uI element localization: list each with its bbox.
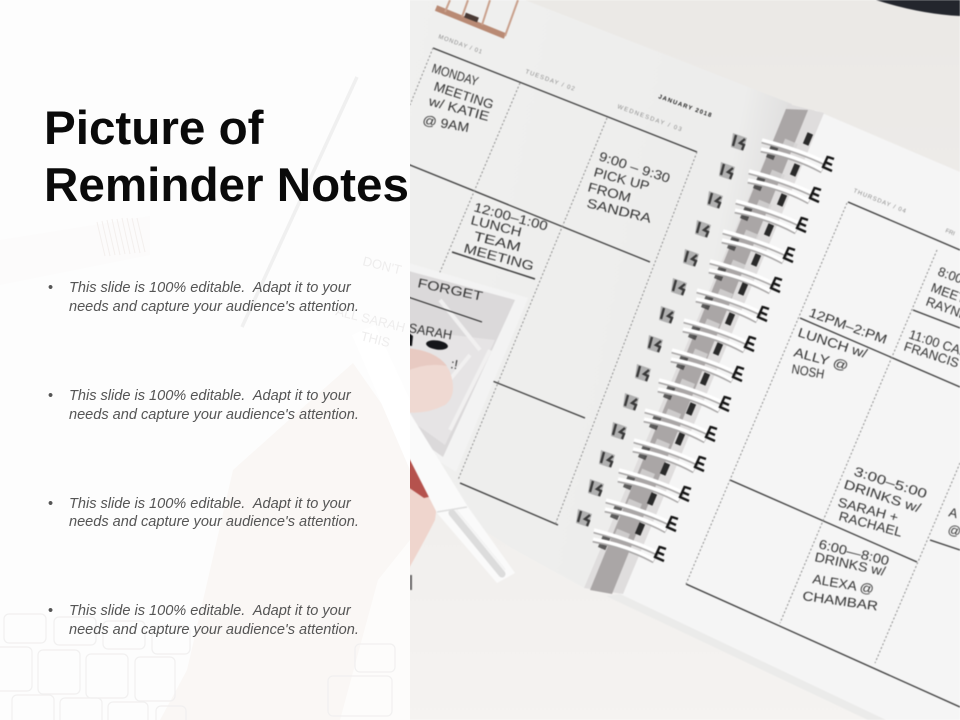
- handwriting left page: PICK UP: [592, 164, 651, 194]
- panel: faded left overlay: ALL SARAH: [334, 303, 407, 335]
- sticky note with hand and pen: [405, 262, 528, 590]
- handwriting right page: RACHAEL: [837, 508, 904, 540]
- note white border: [405, 262, 528, 472]
- handwriting left page: [421, 61, 672, 274]
- title: [44, 102, 409, 212]
- planner day labels left page: WEDNESDAY / 03: [616, 104, 683, 133]
- binder clip: [436, 0, 518, 36]
- handwriting left page: FROM: [586, 179, 633, 205]
- handwriting right page: A: [947, 504, 960, 521]
- handwriting right page: CHAMBAR: [802, 588, 879, 614]
- handwriting right page: FRI: [944, 228, 956, 238]
- handwriting left page: w/ KATIE: [426, 93, 491, 124]
- bullet 3: needs and capture your audience's attention.: [69, 514, 359, 530]
- handwriting right page: SARAH +: [836, 494, 900, 525]
- handwriting left page: LUNCH: [469, 212, 523, 239]
- sticky note with hand and pen: :!: [449, 356, 459, 372]
- bullet 1: •: [48, 280, 53, 296]
- title: Picture of: [44, 102, 264, 155]
- panel: faded left overlay: THIS: [359, 328, 392, 350]
- handwriting right page: [790, 188, 960, 614]
- handwriting right page: ALLY @: [792, 344, 850, 373]
- handwriting left page: SANDRA: [585, 195, 653, 226]
- bullet 2: [48, 388, 359, 423]
- handwriting left page: @ 9AM: [421, 112, 470, 135]
- sticky note with hand and pen: FORGET: [416, 275, 484, 304]
- handwriting right page: NOSH: [790, 361, 826, 382]
- handwriting left page: MONDAY: [430, 61, 481, 89]
- dark object top right: [876, 0, 960, 16]
- handwriting left page: 9:00 – 9:30: [597, 149, 672, 186]
- handwriting left page: TEAM: [472, 228, 522, 255]
- planner day labels left page: [437, 34, 713, 133]
- planner left page: [405, 0, 792, 588]
- planner day labels left page: TUESDAY / 02: [524, 69, 576, 93]
- bullet 2: •: [48, 388, 53, 404]
- sticky note: [405, 270, 515, 457]
- handwriting left page: MEETING: [432, 79, 496, 112]
- spine core: [590, 109, 808, 594]
- lower hand: [405, 450, 437, 570]
- bullet 1: This slide is 100% editable. Adapt it to your: [69, 280, 352, 296]
- bullet 2: needs and capture your audience's attention.: [69, 407, 359, 423]
- planner rules right page: [686, 202, 960, 707]
- handwriting right page: DRINKS w/: [813, 549, 887, 579]
- handwriting right page: ALEXA @: [811, 571, 875, 597]
- faded paper and pen shapes: [0, 216, 150, 285]
- handwriting right page: 3:00–5:00: [852, 464, 929, 501]
- planner day labels left page: MONDAY / 01: [437, 34, 483, 56]
- planner dotted columns left page: [410, 48, 697, 525]
- planner dotted columns right page: [686, 203, 960, 663]
- faded note words: DON'T: [361, 253, 403, 277]
- planner right page: [620, 110, 960, 720]
- bullet 4: needs and capture your audience's attention.: [69, 622, 359, 638]
- hand fingers: [405, 348, 453, 413]
- panel: faded left overlay: [0, 0, 410, 720]
- pen: [405, 405, 515, 583]
- bullet 4: This slide is 100% editable. Adapt it to your: [69, 603, 352, 619]
- handwriting right page: LUNCH w/: [796, 325, 870, 361]
- photo: planner on desk: [405, 0, 960, 720]
- spine: [584, 104, 824, 594]
- bullet 3: •: [48, 496, 53, 512]
- title: Reminder Notes: [44, 159, 409, 212]
- bullet 3: This slide is 100% editable. Adapt it to your: [69, 496, 352, 512]
- faded keyboard: [0, 614, 395, 720]
- planner rules left page: [405, 48, 697, 525]
- spiral rings: [593, 132, 834, 561]
- handwriting right page: 12PM–2:PM: [807, 305, 889, 347]
- bullet 1: [48, 280, 359, 315]
- bullet 2: This slide is 100% editable. Adapt it to your: [69, 388, 352, 404]
- handwriting right page: FRANCIS: [902, 339, 960, 371]
- bullet 4: •: [48, 603, 53, 619]
- handwriting right page: DRINKS w/: [842, 477, 923, 516]
- bullet 1: needs and capture your audience's attention.: [69, 299, 359, 315]
- bullet list: [48, 280, 359, 638]
- desk background: [405, 0, 960, 720]
- handwriting right page: 6:00—8:00: [817, 536, 891, 568]
- sticky note with hand and pen: SARAH: [407, 320, 453, 343]
- bullet 4: [48, 603, 359, 638]
- bullet 3: [48, 496, 359, 530]
- handwriting right page: THURSDAY / 04: [852, 188, 907, 215]
- handwriting left page: 12:00–1:00: [472, 199, 550, 234]
- handwriting left page: MEETING: [462, 240, 536, 274]
- nails: [425, 339, 449, 351]
- faded hand: [160, 363, 410, 720]
- spiral binding holes: [576, 133, 747, 527]
- page stack edge: [606, 594, 886, 720]
- planner day labels left page: JANUARY 2018: [657, 94, 713, 119]
